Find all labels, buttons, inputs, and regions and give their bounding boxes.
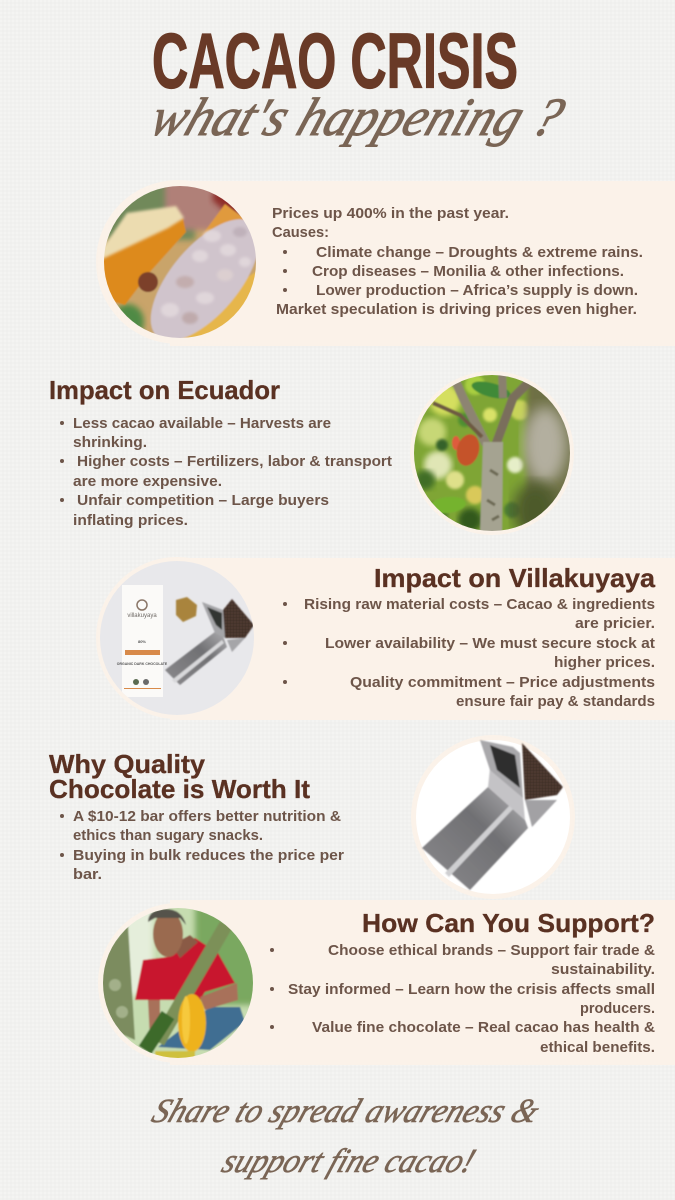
text: Villakuyaya list: are pricier. (575, 616, 655, 632)
panel: why quality chocolate is worth it (49, 735, 575, 899)
text: Villakuyaya list: higher prices. (554, 655, 655, 671)
text: Ecuador list: Less cacao available – Harvests are (73, 416, 331, 432)
text: quality list: A $10-12 bar offers better nutrition & (73, 809, 341, 825)
heading: how can you support: How Can You Support? (362, 908, 655, 938)
text: support list: producers. (580, 1001, 655, 1017)
text: Ecuador list: Higher costs – Fertilizers, labor & transport (77, 454, 392, 470)
text: quality list (60, 809, 344, 883)
text: Villakuyaya list: Lower availability – We must secure stock at (325, 636, 655, 652)
text: quality list: Buying in bulk reduces the price per (73, 848, 344, 864)
heading: why quality chocolate (49, 749, 310, 804)
photo: foil pouch (411, 735, 575, 899)
panel: impact on Villakuyaya (95, 555, 675, 720)
footer: call to action (147, 1092, 546, 1180)
text: Villakuyaya list: ensure fair pay & standards (456, 694, 655, 710)
text: causes list: Causes: (272, 225, 329, 241)
heading: impact on Villakuyaya: Impact on Villakuyaya (374, 563, 656, 593)
photo: cacao pod (96, 180, 256, 344)
heading: impact on Ecuador: Impact on Ecuador (49, 375, 280, 405)
photo: farmer with yellow pod (98, 903, 260, 1065)
text: support list: ethical benefits. (540, 1040, 655, 1056)
footer: call to action: support fine cacao! (217, 1142, 481, 1180)
panel: how can you support (98, 900, 675, 1065)
panel: causes (96, 180, 675, 359)
panel: impact on Ecuador (49, 365, 582, 540)
text: quality list: ethics than sugary snacks. (73, 828, 263, 844)
text: support list: Stay informed – Learn how the crisis affects small (288, 982, 655, 998)
photo: chocolate bar and pouch (95, 555, 260, 720)
heading: why quality chocolate: Why Quality (49, 749, 206, 779)
text: Ecuador list: shrinking. (73, 435, 147, 451)
footer: call to action: Share to spread awareness & (147, 1092, 546, 1130)
photo: cacao tree (410, 371, 574, 535)
subtitle: what's happening ? (142, 88, 572, 148)
text: causes list: Lower production – Africa’s supply is down. (316, 283, 638, 299)
text: causes list (272, 206, 643, 318)
text: causes list: Market speculation is driving prices even higher. (276, 302, 637, 318)
text: Ecuador list: inflating prices. (73, 513, 188, 529)
text: support list: Choose ethical brands – Support fair trade & (328, 943, 655, 959)
photo: chocolate bar and pouch: 80% (138, 639, 146, 644)
text: Villakuyaya list: Rising raw material costs – Cacao & ingredients (304, 597, 655, 613)
text: Ecuador list: are more expensive. (73, 474, 222, 490)
text: Ecuador list (60, 416, 392, 529)
text: support list: sustainability. (551, 962, 655, 978)
text: causes list: Crop diseases – Monilia & other infections. (312, 264, 624, 280)
text: Ecuador list: Unfair competition – Large buyers (77, 493, 329, 509)
text: support list (270, 943, 655, 1056)
text: Villakuyaya list: Quality commitment – Price adjustments (350, 675, 655, 691)
photo: chocolate bar and pouch: villakuyaya (127, 613, 157, 619)
heading: why quality chocolate: Chocolate is Worth It (49, 774, 310, 804)
text: causes list: Climate change – Droughts & extreme rains. (316, 245, 643, 261)
text: support list: Value fine chocolate – Real cacao has health & (312, 1020, 655, 1036)
text: quality list: bar. (73, 867, 102, 883)
photo: chocolate bar and pouch: ORGANIC DARK CHOCOLATE (117, 662, 168, 666)
text: causes list: Prices up 400% in the past year. (272, 206, 509, 222)
text: Villakuyaya list (283, 597, 655, 710)
